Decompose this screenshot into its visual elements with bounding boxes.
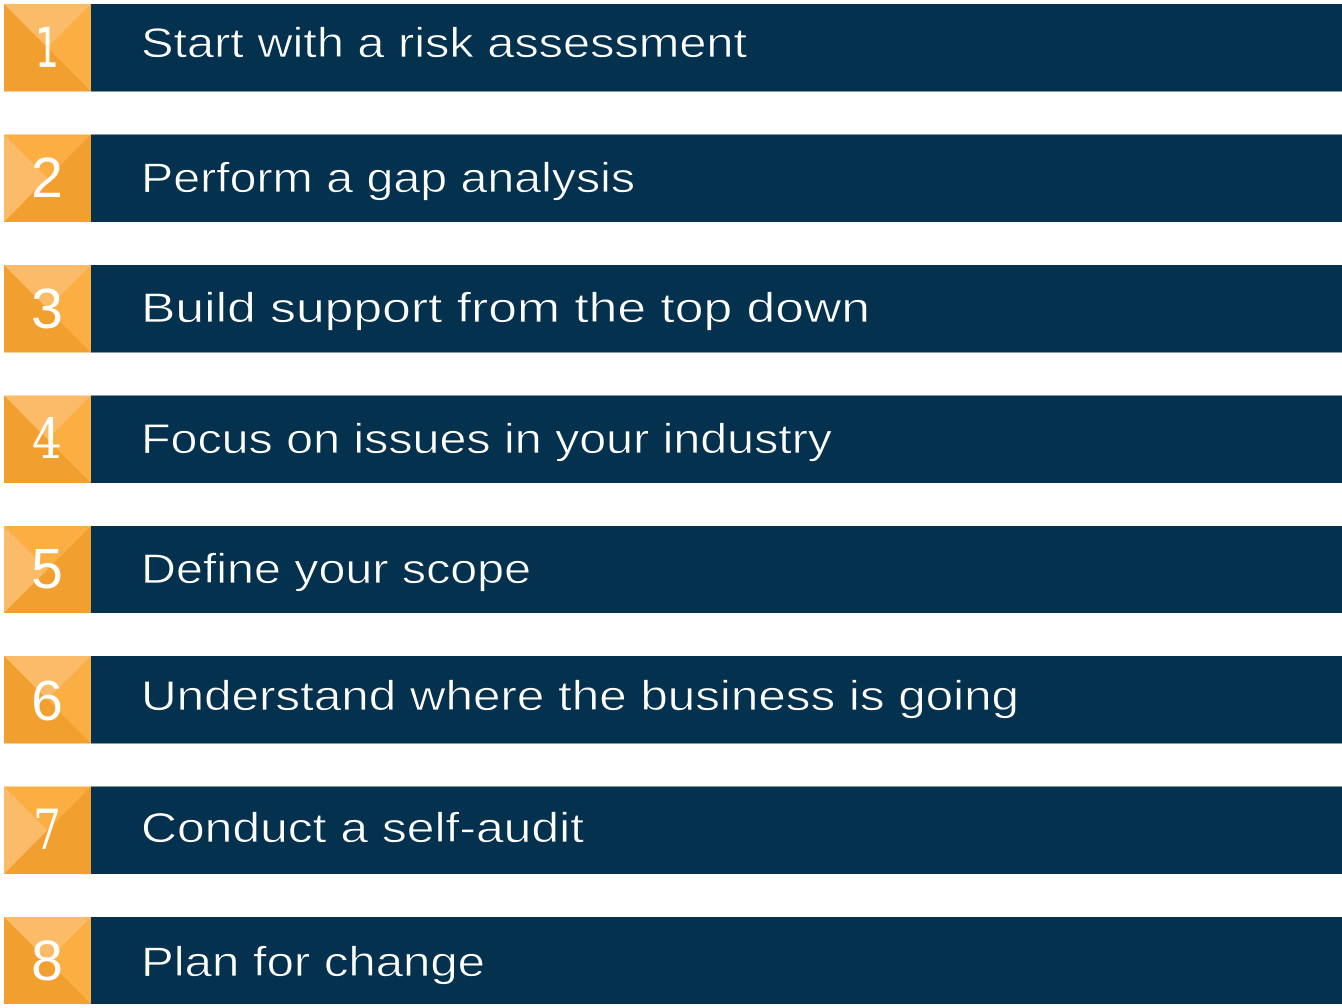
- step 3: Build support from the top down: [141, 284, 870, 331]
- step 4: [4, 396, 1342, 483]
- step 6: Understand where the business is going: [141, 672, 1019, 719]
- step 8: Plan for change: [141, 938, 485, 985]
- step 7: 7: [33, 798, 61, 862]
- step 2: [4, 134, 1342, 222]
- step 2: 2: [31, 146, 63, 210]
- step 5: [4, 526, 1342, 613]
- step 4: Focus on issues in your industry: [141, 415, 832, 462]
- step 1: Start with a risk assessment: [141, 19, 747, 66]
- step 7: Conduct a self-audit: [141, 804, 584, 851]
- step 5: 5: [31, 537, 63, 601]
- step 7: [4, 786, 1342, 874]
- step 3: 3: [31, 277, 63, 341]
- step 8: [4, 917, 1342, 1004]
- step 2: Perform a gap analysis: [141, 154, 635, 201]
- step 8: 8: [31, 929, 63, 993]
- step 1: [4, 4, 1342, 92]
- step 6: [4, 656, 1342, 744]
- step 1: 1: [35, 16, 59, 80]
- step 4: 4: [32, 407, 62, 471]
- step 3: [4, 265, 1342, 352]
- step 5: Define your scope: [141, 545, 531, 592]
- step 6: 6: [31, 669, 63, 733]
